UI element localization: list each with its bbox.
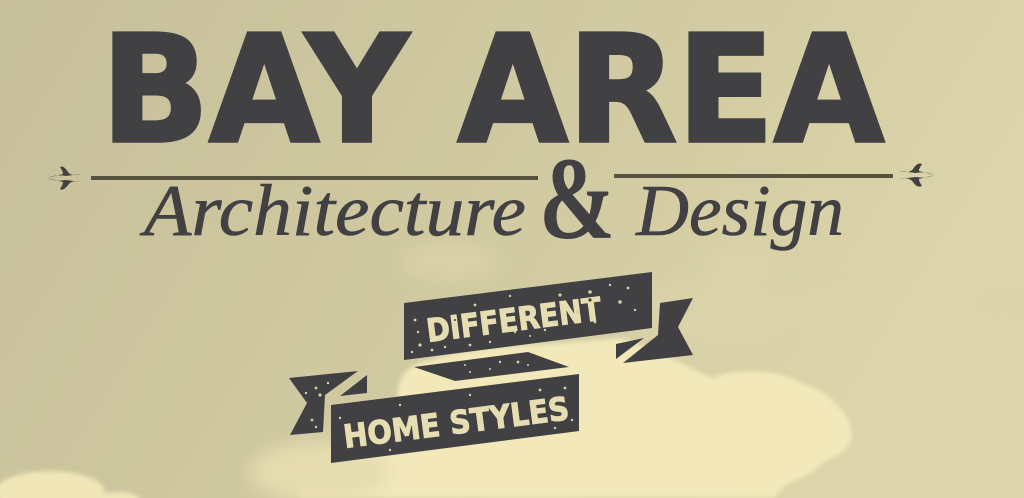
left divider line: [91, 176, 538, 180]
banner text: HOME STYLES: HOME STYLES: [341, 389, 571, 456]
right divider line: [614, 174, 893, 178]
subtitle: Architecture: Architecture: [140, 170, 526, 251]
title: BAY AREA: BAY AREA: [101, 4, 884, 176]
ribbon: lower band: [331, 374, 579, 463]
faint background clouds: [400, 242, 1024, 350]
ribbon: right fold: [616, 338, 644, 359]
main cloud: [298, 338, 852, 498]
subtitle: Design: Design: [635, 170, 844, 251]
ampersand: &: [539, 133, 615, 264]
small cloud bottom left: [0, 471, 140, 498]
icon: right ornament: [899, 163, 934, 187]
icon: left ornament: [48, 166, 81, 190]
distress marks over DIFFERENT: [454, 298, 598, 326]
soft left edge of main cloud: [250, 442, 390, 498]
ribbon: top band: [404, 272, 652, 360]
distress speckles: [305, 284, 636, 451]
ribbon: centre fold: [414, 352, 569, 381]
banner text: DIFFERENT: DIFFERENT: [424, 290, 604, 350]
ribbon banner: [289, 272, 693, 463]
ribbon: right tail: [623, 298, 693, 363]
ribbon: left fold: [340, 375, 367, 396]
ribbon: left tail: [289, 371, 358, 435]
